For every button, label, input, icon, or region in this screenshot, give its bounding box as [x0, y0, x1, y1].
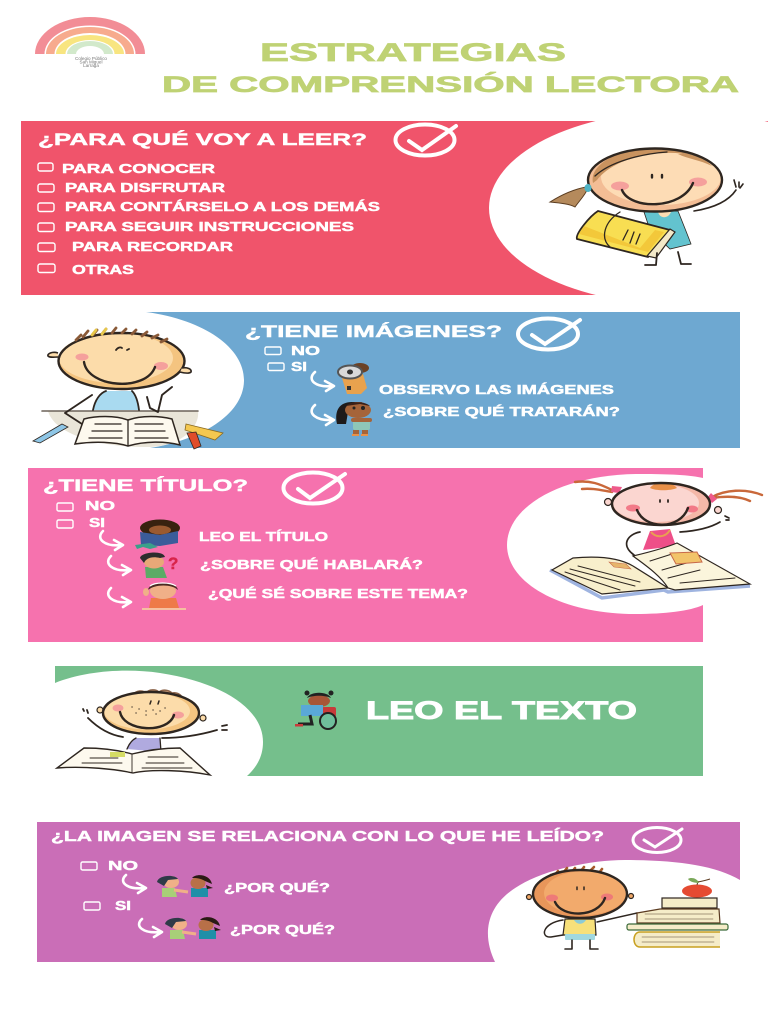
heading: la imagen se relaciona: ¿LA IMAGEN SE RELACIONA CON LO QUE HE LEÍDO? [51, 828, 604, 845]
icon: child reading blue book [135, 520, 180, 549]
character: boy reading at desk [33, 328, 223, 449]
icon: arrow [123, 875, 146, 893]
icon: check circle [518, 318, 580, 350]
logo: rainbow: Larraga [83, 63, 99, 68]
icon: child with question mark [140, 553, 178, 578]
options no and si [57, 499, 115, 530]
text: qué sé sobre este tema: ¿QUÉ SÉ SOBRE ESTE TEMA? [208, 586, 468, 601]
icon: arrow [139, 919, 162, 937]
text: leo el texto: LEO EL TEXTO [366, 697, 637, 725]
text: observo las imágenes: OBSERVO LAS IMÁGENES [379, 382, 614, 397]
icon: arrow [108, 556, 131, 575]
text: sobre qué hablará: ¿SOBRE QUÉ HABLARÁ? [200, 557, 423, 572]
icon: check circle [284, 472, 345, 504]
icon: check circle [396, 124, 456, 156]
checklist [38, 162, 380, 277]
options no and si [81, 859, 138, 913]
icon: arrow [100, 531, 123, 550]
logo: rainbow: Colegio Público [75, 56, 107, 61]
character: girl with open book [550, 481, 762, 598]
panel: tiene título [28, 468, 768, 642]
text: por qué: ¿POR QUÉ? [230, 922, 335, 937]
text: leo el título: LEO EL TÍTULO [199, 529, 328, 544]
panel: la imagen se relaciona [37, 822, 740, 962]
character: freckled boy with book [57, 690, 227, 775]
panel: leo el texto [55, 666, 703, 776]
checklist: PARA CONTÁRSELO A LOS DEMÁS [65, 199, 380, 214]
panel: tiene imágenes [33, 312, 740, 449]
icon: arrow [312, 372, 334, 391]
checklist: PARA RECORDAR [72, 240, 233, 254]
options no and si: NO [85, 499, 115, 513]
checklist: PARA CONOCER [62, 162, 215, 176]
logo: rainbow: San Miguel [80, 60, 102, 64]
icon: child with question mark: ? [168, 554, 178, 573]
icon: two children talking [157, 875, 213, 897]
icon: child with magnifier [338, 363, 369, 394]
text: por qué: ¿POR QUÉ? [224, 880, 330, 895]
icon: arrow [312, 405, 334, 425]
options no and si: NO [108, 859, 138, 873]
options no and si: SI [115, 899, 131, 913]
icon: check circle [633, 828, 682, 852]
text: sobre qué tratarán: ¿SOBRE QUÉ TRATARÁN? [383, 404, 620, 419]
logo: rainbow [35, 17, 145, 68]
icon: two children talking [165, 917, 221, 939]
panel: para qué voy a leer [21, 111, 768, 305]
character: boy with books and apple [526, 867, 728, 949]
icon: thinking girl [336, 402, 372, 436]
title [162, 39, 739, 97]
icon: child raising hand [142, 582, 186, 610]
heading: para qué voy a leer: ¿PARA QUÉ VOY A LEER? [38, 130, 367, 149]
checklist: PARA DISFRUTAR [65, 181, 225, 195]
character: girl with yellow book [550, 148, 743, 265]
title: DE COMPRENSIÓN LECTORA [162, 72, 739, 97]
title: ESTRATEGIAS [260, 39, 566, 67]
heading: tiene imágenes: ¿TIENE IMÁGENES? [245, 322, 502, 341]
icon: child in wheelchair reading [295, 690, 336, 729]
options no and si: SI [89, 516, 105, 530]
checklist: PARA SEGUIR INSTRUCCIONES [65, 220, 354, 234]
checklist: OTRAS [72, 263, 134, 277]
heading: tiene título: ¿TIENE TÍTULO? [43, 476, 248, 495]
options no and si [265, 344, 320, 374]
options no and si: NO [291, 344, 320, 358]
options no and si: SI [291, 360, 307, 374]
icon: arrow [108, 588, 131, 607]
